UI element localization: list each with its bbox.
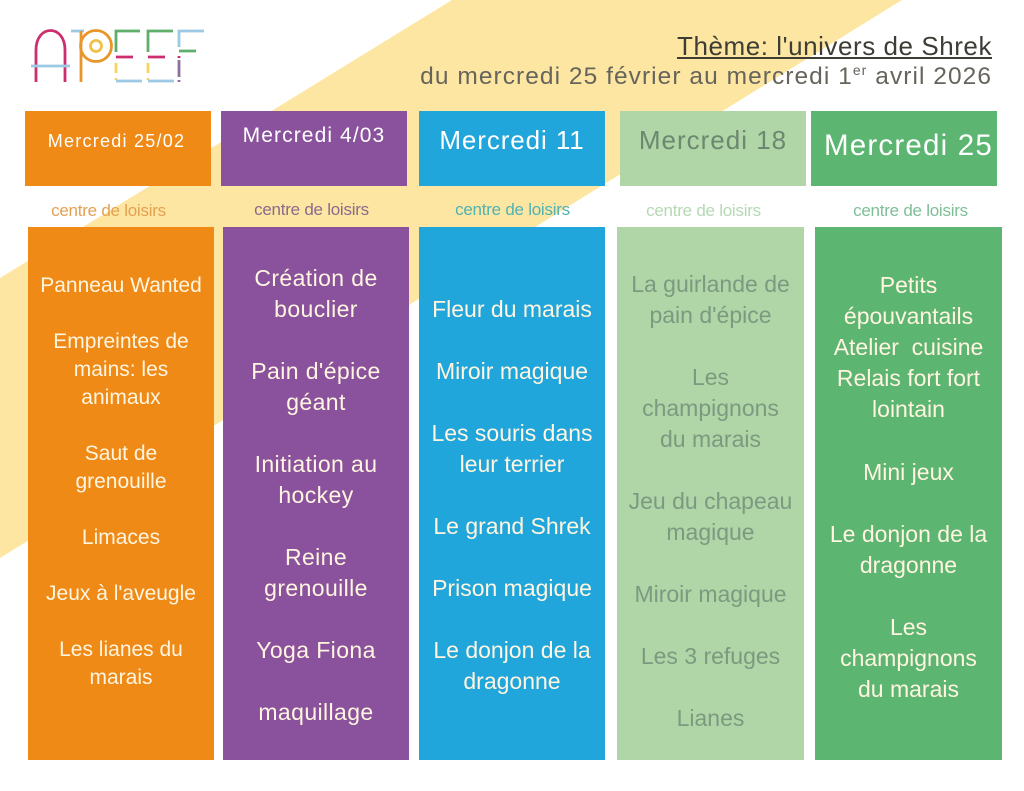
activity: Les lianes du marais: Les lianes du: [59, 638, 183, 661]
activity: Initiation au hockey: [255, 451, 377, 508]
activity: Reine grenouille: Reine: [285, 544, 347, 570]
activity: Petits épouvantails: [844, 272, 973, 329]
activity: Relais fort fort lointain: lointain: [872, 396, 945, 422]
activity: Pain d'épice géant: géant: [286, 389, 346, 415]
activity: Lianes: Lianes: [677, 705, 744, 731]
header: Mercredi 25: [811, 111, 997, 186]
activity: La guirlande de pain d'épice: [631, 271, 790, 328]
activity: Le donjon de la dragonne: [830, 521, 988, 578]
activity: Jeux à l'aveugle: Jeux à l'aveugle: [46, 582, 196, 605]
activity: Empreintes de mains: [53, 330, 189, 409]
activity: Le donjon de la dragonne: Le donjon de la: [830, 521, 987, 547]
header: Mercredi 18: [620, 111, 806, 186]
activity: Jeu du chapeau magique: [629, 488, 792, 545]
activity: Les champignons du marais: champignons: [642, 395, 779, 421]
activity: Les champignons du marais: [840, 614, 977, 702]
activity: Relais fort fort lointain: Relais fort fort: [837, 365, 980, 391]
activity: Pain d'épice géant: Pain d'épice: [251, 358, 381, 384]
activity: Création de bouclier: Création de: [254, 265, 378, 291]
header: Mercredi 25/02: Mercredi 25/02: [48, 131, 185, 151]
activity: Les champignons du marais: Les: [692, 364, 729, 390]
activity: Saut de grenouille: grenouille: [75, 470, 167, 493]
activity: Les souris dans leur terrier: Les souris dans: [431, 420, 593, 446]
header: Mercredi 11: Mercredi 11: [439, 125, 585, 155]
subtitle: dates: du mercredi 25 février au mercredi 1er avril 2026: [420, 62, 992, 90]
activity: Le grand Shrek: Le grand Shrek: [433, 513, 591, 539]
label: centre de loisirs (light green): centre de loisirs: [646, 201, 761, 220]
activity: Création de bouclier: [254, 265, 378, 322]
activity: Empreintes de mains: animaux: [81, 386, 161, 409]
activity: Limaces: Limaces: [82, 526, 160, 549]
activity: Initiation au hockey: hockey: [278, 482, 354, 508]
panel: activities 25: [815, 227, 1002, 760]
activity: Miroir magique: Miroir magique: [436, 358, 588, 384]
activity: Miroir magique: Miroir magique: [634, 581, 787, 607]
header: Mercredi 25/02: [25, 111, 211, 186]
activity: Les souris dans leur terrier: [431, 420, 593, 477]
title: Thème: l'univers de Shrek: [677, 31, 992, 61]
activity: Création de bouclier: bouclier: [274, 296, 358, 322]
activity: Relais fort fort lointain: [837, 365, 980, 422]
activity: Le donjon de la dragonne: dragonne: [860, 552, 957, 578]
activity: La guirlande de pain d'épice: La guirlande de: [631, 271, 790, 297]
activity: Initiation au hockey: Initiation au: [255, 451, 377, 477]
header: Mercredi 11: [419, 111, 605, 186]
activity: Pain d'épice géant: [251, 358, 381, 415]
panel: activities 11: [419, 227, 605, 760]
panel: activities 4/03: [223, 227, 409, 760]
activity: Les lianes du marais: marais: [89, 666, 152, 689]
activity: Panneau Wanted: Panneau Wanted: [40, 274, 202, 297]
activity: Les champignons du marais: du marais: [858, 676, 959, 702]
activity: Les champignons du marais: [642, 364, 779, 452]
activity: Empreintes de mains: mains: les: [74, 358, 168, 381]
header: Mercredi 25: Mercredi 25: [824, 129, 993, 162]
logo: APEEF: [31, 29, 204, 82]
label: centre de loisirs (purple): centre de loisirs: [254, 200, 369, 219]
activity: Le donjon de la dragonne: Le donjon de la: [433, 637, 591, 663]
header: Mercredi 4/03: Mercredi 4/03: [243, 124, 385, 147]
activity: Le donjon de la dragonne: dragonne: [463, 668, 561, 694]
activity: Les 3 refuges: Les 3 refuges: [641, 643, 780, 669]
activity: Yoga Fiona: Yoga Fiona: [256, 637, 376, 663]
label: centre de loisirs (blue): centre de loisirs: [455, 200, 570, 219]
activity: Petits épouvantails: Petits: [880, 272, 937, 298]
activity: Mini jeux: Mini jeux: [863, 459, 954, 485]
activity: Reine grenouille: grenouille: [264, 575, 368, 601]
activity: Jeu du chapeau magique: magique: [666, 519, 755, 545]
activity: Saut de grenouille: Saut de: [85, 442, 157, 465]
panel: activities 25/02: [28, 227, 214, 760]
activity: maquillage: maquillage: [258, 699, 374, 725]
header: Mercredi 4/03: [221, 111, 407, 186]
activity: Fleur du marais: Fleur du marais: [432, 296, 592, 322]
activity: Petits épouvantails: épouvantails: [844, 303, 973, 329]
label: centre de loisirs (green): centre de loisirs: [853, 201, 968, 220]
activity: Les champignons du marais: champignons: [840, 645, 977, 671]
activity: Les souris dans leur terrier: leur terrier: [460, 451, 564, 477]
activity: Prison magique: Prison magique: [432, 575, 592, 601]
activity: Les lianes du marais: [59, 638, 183, 689]
activity: Empreintes de mains: Empreintes de: [53, 330, 189, 353]
activity: Les champignons du marais: du marais: [660, 426, 761, 452]
activity: Reine grenouille: [264, 544, 368, 601]
activity: Le donjon de la dragonne: [433, 637, 591, 694]
activity: Atelier cuisine: Atelier cuisine: [834, 334, 983, 360]
activity: Jeu du chapeau magique: Jeu du chapeau: [629, 488, 792, 514]
header: Mercredi 18: Mercredi 18: [639, 125, 787, 155]
activity: Les champignons du marais: Les: [890, 614, 927, 640]
activity: La guirlande de pain d'épice: pain d'épice: [649, 302, 772, 328]
panel: activities 18: [617, 227, 804, 760]
label: centre de loisirs (orange): centre de loisirs: [51, 201, 166, 220]
activity: Saut de grenouille: [75, 442, 167, 493]
